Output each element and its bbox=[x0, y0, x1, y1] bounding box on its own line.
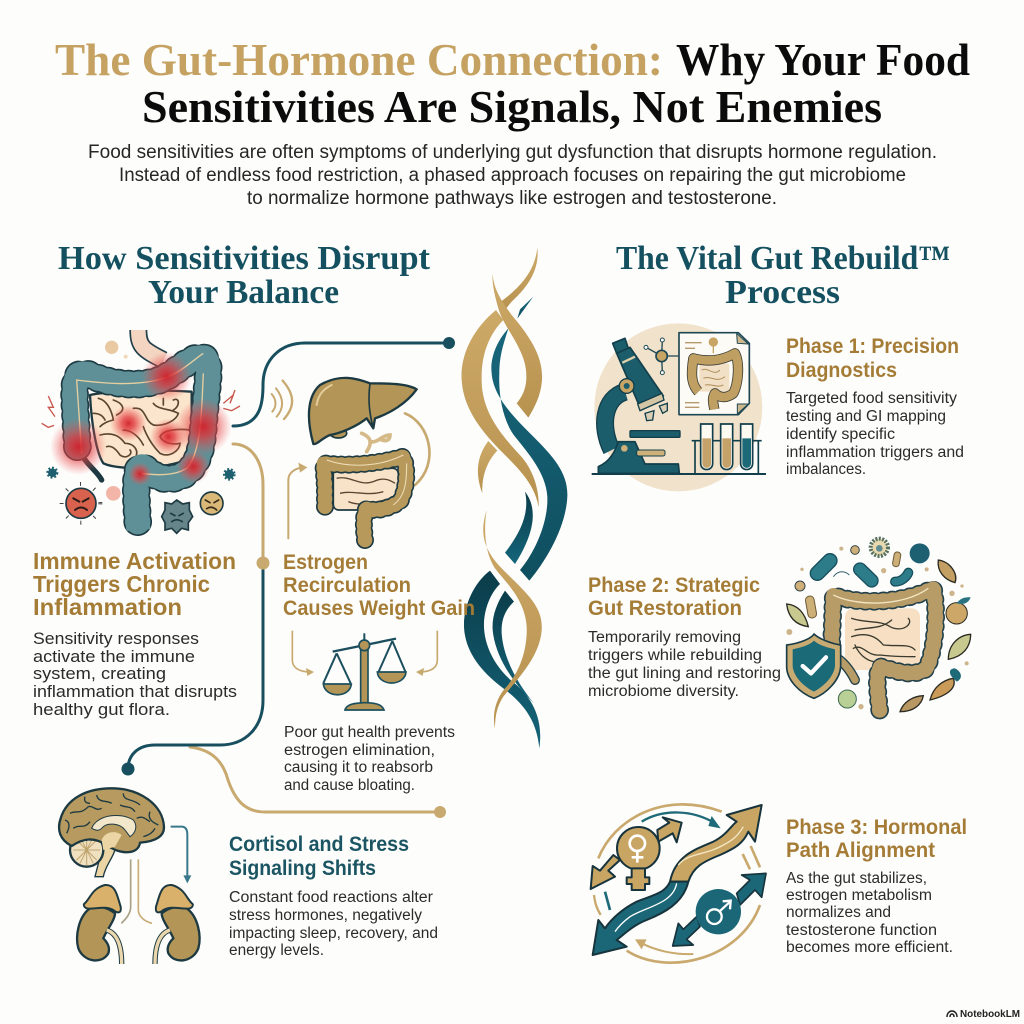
heading: how sensitivities disrupt: How Sensitivities Disrupt bbox=[58, 240, 431, 277]
text: phase 1: inflammation triggers and bbox=[786, 444, 964, 461]
text: immune activation: activate the immune bbox=[33, 647, 195, 666]
connector lines bbox=[122, 337, 455, 818]
icon: signal waves bbox=[272, 381, 292, 419]
text: estrogen body: Poor gut health prevents bbox=[284, 724, 455, 741]
helix ribbon divider bbox=[462, 247, 567, 748]
text: immune activation: Sensitivity responses bbox=[33, 629, 199, 648]
text: phase 3: normalizes and bbox=[786, 904, 891, 921]
text: phase 3: becomes more efficient. bbox=[786, 939, 953, 956]
title: The Gut-Hormone Connection: bbox=[55, 34, 663, 85]
icon: hormonal arrows bbox=[591, 804, 766, 963]
heading: how sensitivities disrupt bbox=[58, 240, 431, 311]
text: cortisol bbox=[229, 832, 438, 959]
text: cortisol: Cortisol and Stress bbox=[229, 832, 409, 856]
text: estrogen heading: Estrogen bbox=[283, 550, 368, 574]
text: phase 3: estrogen metabolism bbox=[786, 887, 932, 904]
text: cortisol: energy levels. bbox=[229, 942, 324, 959]
text: phase 2: microbiome diversity. bbox=[588, 683, 739, 700]
text: immune activation: healthy gut flora. bbox=[33, 700, 170, 719]
text: phase 3: As the gut stabilizes, bbox=[786, 870, 927, 887]
text: phase 1: Diagnostics bbox=[786, 358, 897, 382]
text: immune activation: Triggers Chronic bbox=[33, 571, 210, 597]
icon: liver and gut bbox=[288, 378, 429, 540]
heading: vital gut rebuild: The Vital Gut Rebuild™ bbox=[616, 240, 950, 277]
heading: vital gut rebuild bbox=[616, 240, 950, 311]
text: phase 2 bbox=[588, 573, 781, 700]
text: immune activation bbox=[33, 548, 237, 719]
icon: gut restoration with shield and foods bbox=[786, 539, 971, 713]
text: phase 3 bbox=[786, 815, 967, 956]
text: phase 3: Path Alignment bbox=[786, 838, 935, 862]
text: immune activation: Immune Activation bbox=[33, 548, 236, 574]
text: estrogen body: causing it to reabsorb bbox=[284, 759, 433, 776]
notebooklm badge: NotebookLM bbox=[960, 1008, 1020, 1020]
text: estrogen heading bbox=[283, 550, 475, 620]
text: phase 2: the gut lining and restoring bbox=[588, 665, 781, 682]
text: phase 1: testing and GI mapping bbox=[786, 408, 946, 425]
text: phase 3: testosterone function bbox=[786, 922, 937, 939]
text: phase 1 bbox=[786, 334, 964, 478]
icon: microscope and diagnostics bbox=[592, 323, 766, 491]
title bbox=[55, 34, 970, 132]
icon: inflamed intestines bbox=[42, 330, 240, 533]
icon: brain and adrenal kidneys bbox=[59, 788, 200, 964]
text: phase 2: Phase 2: Strategic bbox=[588, 573, 760, 597]
icon: balance scale bbox=[292, 631, 437, 710]
subtitle bbox=[88, 142, 937, 209]
text: phase 1: Phase 1: Precision bbox=[786, 334, 959, 358]
text: estrogen heading: Causes Weight Gain bbox=[283, 596, 475, 620]
text: phase 1: Targeted food sensitivity bbox=[786, 390, 957, 407]
text: immune activation: system, creating bbox=[33, 664, 166, 683]
title: Why Your Food bbox=[676, 34, 970, 85]
heading: vital gut rebuild: Process bbox=[725, 274, 840, 311]
text: phase 1: identify specific bbox=[786, 426, 895, 443]
text: phase 2: Gut Restoration bbox=[588, 596, 742, 620]
text: estrogen heading: Recirculation bbox=[283, 573, 411, 597]
text: immune activation: inflammation that disrupts bbox=[33, 682, 237, 701]
title: Sensitivities Are Signals, Not Enemies bbox=[142, 81, 882, 132]
subtitle: to normalize hormone pathways like estrogen and testosterone. bbox=[247, 188, 777, 209]
subtitle: Instead of endless food restriction, a phased approach focuses on repairing the gut microbiome bbox=[119, 165, 906, 186]
subtitle: Food sensitivities are often symptoms of underlying gut dysfunction that disrupts hormone regulation. bbox=[88, 142, 937, 163]
text: cortisol: stress hormones, negatively bbox=[229, 907, 422, 924]
text: estrogen body: and cause bloating. bbox=[284, 777, 415, 794]
text: cortisol: impacting sleep, recovery, and bbox=[229, 925, 438, 942]
text: cortisol: Signaling Shifts bbox=[229, 856, 376, 880]
text: estrogen body bbox=[284, 724, 455, 794]
text: immune activation: Inflammation bbox=[33, 594, 182, 620]
text: phase 2: triggers while rebuilding bbox=[588, 647, 762, 664]
text: phase 2: Temporarily removing bbox=[588, 629, 741, 646]
text: phase 3: Phase 3: Hormonal bbox=[786, 815, 967, 839]
text: cortisol: Constant food reactions alter bbox=[229, 889, 433, 906]
text: phase 1: imbalances. bbox=[786, 461, 866, 478]
text: estrogen body: estrogen elimination, bbox=[284, 742, 435, 759]
heading: how sensitivities disrupt: Your Balance bbox=[148, 274, 339, 311]
